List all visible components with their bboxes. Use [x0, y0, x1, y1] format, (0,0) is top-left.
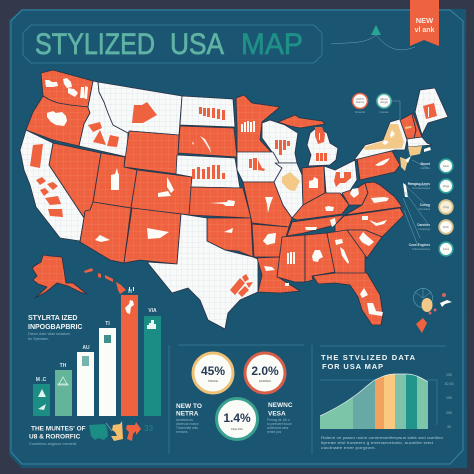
NE circle teal: Insterae — [379, 111, 389, 114]
Texas — [147, 214, 258, 329]
Pennsylvania — [357, 151, 400, 180]
Florida — [313, 273, 383, 325]
callout 4: Darches — [417, 223, 430, 227]
bar H: H — [128, 289, 132, 295]
right panel rule — [320, 345, 446, 347]
area chart — [320, 370, 437, 430]
callout 2: Rngs — [443, 184, 450, 188]
left heading: STYLRTA IZED — [28, 315, 77, 322]
chart title: THE STVLIZED DATA — [321, 353, 416, 362]
text block right: NEWNC — [268, 402, 293, 409]
callout 5: Cons — [443, 247, 450, 251]
Oregon — [26, 96, 90, 146]
bar AU: AU — [82, 345, 90, 351]
left subtext: for Sperssen — [28, 337, 48, 341]
stat 2.0% — [245, 353, 285, 393]
title — [35, 28, 303, 61]
callout 3: Crng — [443, 205, 449, 209]
Arkansas — [252, 224, 289, 257]
center panel rules — [169, 345, 312, 454]
Hawaii title mark — [129, 287, 134, 291]
chart axis labels — [444, 373, 454, 429]
Tennessee — [287, 215, 344, 236]
stat 1.4%: FELLING — [231, 427, 243, 431]
text block right — [267, 402, 293, 434]
callout 1: Mvst — [443, 164, 449, 168]
text block right: su peeueet fouue — [267, 422, 292, 426]
Virginia — [345, 182, 402, 215]
text block left: NETRA — [176, 410, 199, 418]
NE circle teal — [377, 94, 391, 114]
stat 2.0%: 2.0% — [251, 364, 279, 378]
figure 33: 33 — [144, 424, 153, 433]
bar chart — [33, 289, 161, 416]
Idaho — [79, 81, 128, 157]
Oklahoma — [207, 218, 253, 257]
coast slivers — [403, 147, 431, 197]
text block right: arbemeok aeur — [267, 426, 289, 430]
bottom-left heading — [29, 426, 86, 440]
Illinois — [274, 163, 303, 218]
chart axis labels: 30 30 — [444, 382, 454, 386]
Michigan upper — [278, 115, 325, 128]
Connecticut and Rhode Island — [408, 146, 422, 156]
Hawaii — [84, 268, 126, 294]
bar VIA: VIA — [148, 308, 157, 314]
Alabama — [305, 233, 335, 282]
left heading: INPOGBAPBRIC — [28, 324, 82, 331]
Wyoming — [124, 131, 179, 174]
callout 1: Mount — [420, 162, 431, 166]
Michigan lower — [307, 127, 338, 166]
callout 2 — [408, 179, 453, 193]
Missouri — [243, 182, 292, 227]
stat 45%: PMAKE — [208, 379, 218, 383]
icon: plane marker — [371, 25, 381, 35]
NE circle teal: drngly — [380, 100, 388, 104]
bottom-left heading: U8 & RORORFIC — [29, 434, 81, 440]
stat 45%: 45% — [201, 364, 225, 378]
South Carolina — [347, 230, 382, 258]
leader line — [392, 101, 400, 120]
text block right: Prenog de 1rb o — [267, 418, 290, 422]
Arizona — [80, 202, 131, 263]
text block left: Tresenntte ants — [176, 426, 198, 430]
stat 1.4%: 1.4% — [223, 411, 251, 425]
callout 4 — [417, 220, 453, 234]
Vermont and New Hampshire — [400, 113, 422, 139]
Maine — [415, 88, 448, 135]
chart title — [321, 353, 416, 371]
Nevada — [49, 143, 101, 218]
bottom-left subtext: Coontmea angtoue memedt. — [29, 442, 77, 446]
Utah — [93, 153, 137, 208]
right callouts — [408, 159, 453, 256]
New Jersey — [400, 157, 408, 171]
California — [20, 130, 84, 241]
left subtext — [28, 332, 70, 341]
Minnesota — [236, 95, 280, 153]
Mississippi — [277, 235, 305, 282]
text block left: Iwmelutorvs — [176, 418, 193, 422]
chart caption: Raiece ve pasen nuice comemoehterpsus sitek and oueltion — [321, 436, 443, 440]
bar M.C: M .C — [36, 377, 47, 383]
chart caption: ciccinaee ener porgrom. — [321, 446, 376, 450]
callout 4: Croupinge — [418, 227, 431, 231]
stat 45% — [193, 353, 233, 393]
NE circle orange: AUTO — [356, 97, 365, 101]
South Dakota — [178, 126, 237, 157]
NE circle orange: Garms — [356, 100, 365, 104]
NE circle orange: Ontworks — [355, 111, 366, 114]
icons: small states — [89, 421, 141, 441]
bar TH: TH — [60, 363, 67, 369]
Ohio — [324, 160, 357, 195]
North Dakota — [180, 96, 235, 127]
callout 1: Cultures — [420, 166, 431, 170]
bar TI: TI — [105, 321, 110, 327]
Atlantic leader lines — [403, 160, 428, 246]
Kansas — [189, 187, 251, 218]
text block left: errmces — [176, 430, 188, 434]
Massachusetts — [407, 137, 432, 147]
ribbon: vl ank — [415, 27, 435, 34]
callout 4: Drch — [443, 225, 449, 229]
Kentucky — [292, 193, 349, 220]
title: MAP — [241, 28, 303, 61]
title: USA — [170, 28, 224, 61]
North Carolina — [335, 208, 404, 237]
West Virginia — [342, 183, 368, 205]
chart caption: itpreae eful incseem g enenseortoeic, suuelhe sred — [321, 441, 433, 445]
ribbon: NEW — [416, 16, 434, 25]
NE circle teal: Alison — [380, 97, 388, 101]
Washington — [41, 70, 93, 107]
text block right: renfot pos — [267, 430, 282, 434]
Nebraska — [176, 155, 240, 188]
callout 2: Ranging Ames — [408, 182, 430, 186]
chart axis labels: 100 — [446, 396, 452, 400]
title plate — [23, 25, 322, 63]
chart axis labels: 200 — [446, 411, 452, 415]
callout 3 — [418, 200, 453, 214]
Alaska — [32, 255, 87, 298]
left heading — [28, 315, 82, 331]
chart axis labels: 100 — [446, 373, 452, 377]
callout 3: Atomsdas — [418, 207, 431, 211]
callout 1 — [420, 159, 453, 173]
callout 5: Unknownstores — [412, 247, 431, 251]
callout 2: Compensarges — [412, 186, 431, 190]
chart axis labels: 30 — [447, 425, 451, 429]
Louisiana — [257, 257, 300, 293]
bottom-left heading: THE MUNTES' OF — [31, 426, 86, 432]
Montana — [98, 82, 182, 135]
chart caption — [321, 436, 443, 450]
text block left — [176, 403, 202, 434]
title: STYLIZED — [35, 28, 155, 61]
Caribbean decoration — [414, 288, 452, 333]
Iowa — [237, 152, 282, 182]
Wisconsin — [262, 120, 298, 163]
USA map — [20, 70, 448, 329]
text block left: NEW TO — [176, 403, 202, 410]
Georgia — [327, 230, 365, 274]
callout 5: Cons Engines — [409, 243, 430, 247]
NE circle orange — [352, 94, 368, 114]
Indiana — [302, 166, 325, 205]
New York — [354, 119, 407, 160]
Colorado — [131, 170, 192, 215]
New Mexico — [124, 208, 181, 264]
text block left: cisenvus mvace — [176, 422, 199, 426]
callout 3: Coring — [420, 203, 430, 207]
ribbon — [410, 0, 439, 46]
text block right: VESA — [268, 410, 286, 418]
callout 5 — [409, 242, 453, 256]
left subtext: Damn dolor vitae sedatum — [28, 332, 70, 336]
chart title: FOR USA MAP — [322, 362, 383, 371]
stat 1.4% — [216, 398, 258, 440]
stat 2.0%: EURDES — [259, 379, 271, 383]
flight path — [331, 35, 415, 50]
